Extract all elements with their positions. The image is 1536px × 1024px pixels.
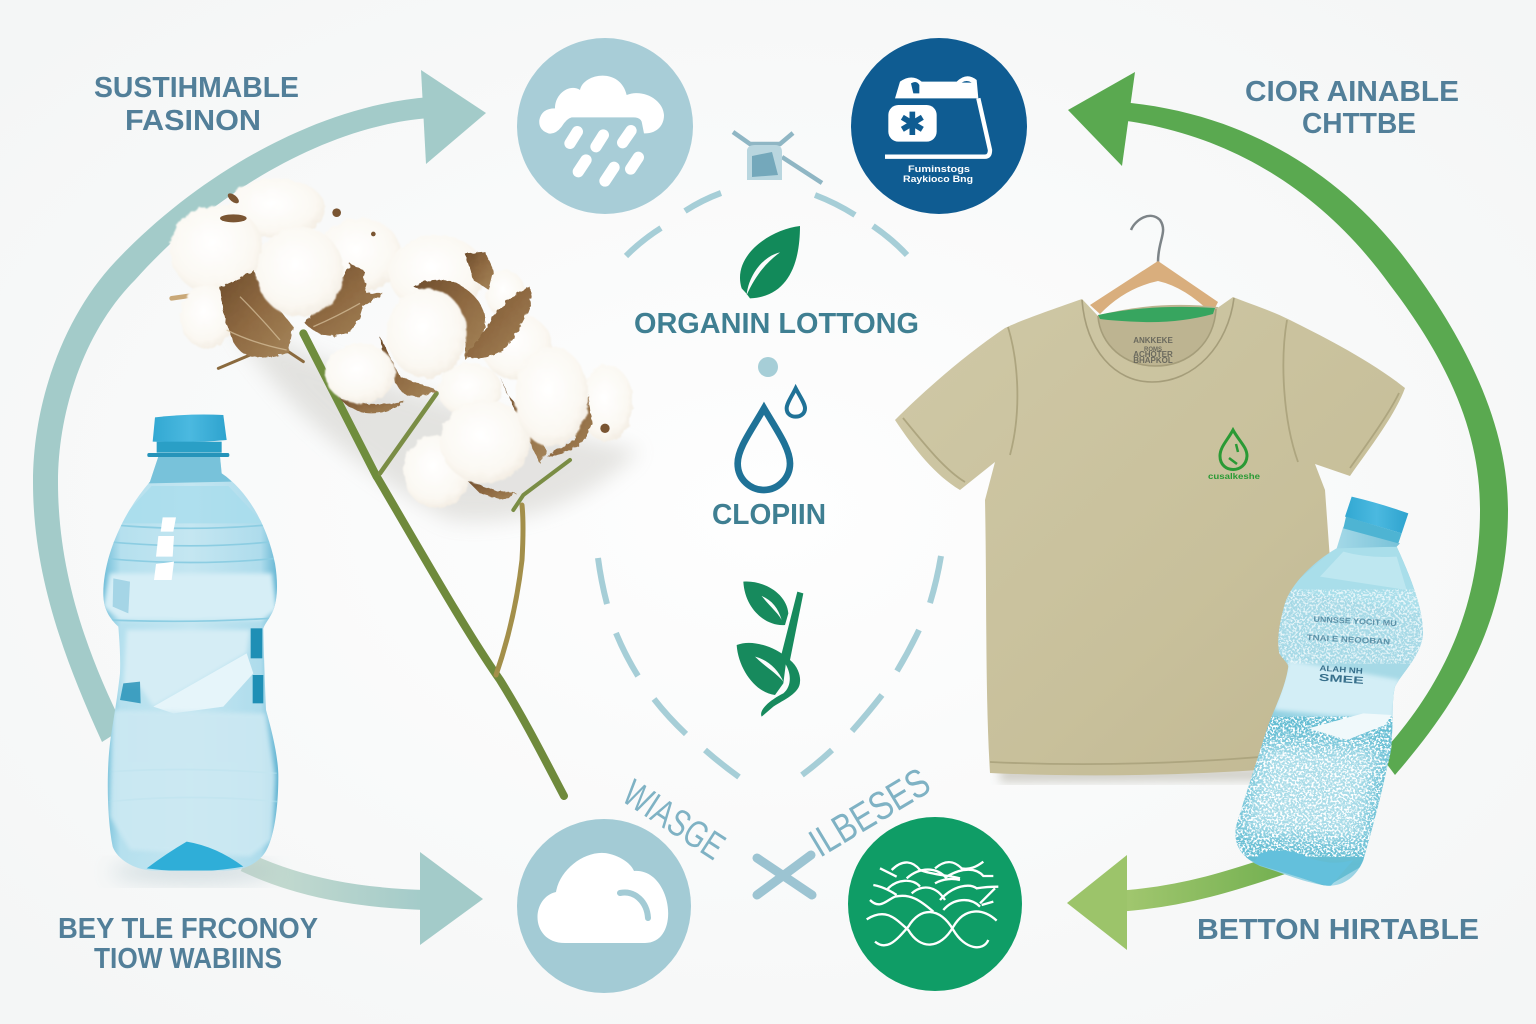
right bottle sparkle (1273, 590, 1427, 663)
right bottle shoulder (1287, 547, 1423, 613)
arrow: bottom left (245, 852, 483, 945)
neck label: BHAPKOL (1133, 356, 1173, 365)
right bottle clear window (1273, 660, 1400, 720)
dashed ring: bottom (598, 556, 941, 777)
left bottle cap (153, 415, 227, 442)
right bottle label text (1307, 615, 1397, 687)
left heading: FASINON (125, 105, 261, 137)
left heading: SUSTIHMABLE (94, 72, 299, 104)
neck label: ACHOTER (1133, 350, 1173, 359)
collar seams (1082, 298, 1234, 382)
sleeve and hem seams (903, 320, 1399, 764)
upper stems (172, 295, 570, 510)
left bottle ribs (105, 525, 278, 802)
right heading: CIOR AINABLE (1245, 76, 1459, 108)
neck label: ROMS (1144, 347, 1162, 353)
icon: cross (757, 855, 812, 895)
left bottle lower water (110, 710, 275, 857)
icon: leaf (740, 226, 800, 298)
right bottle label text: SMEE (1318, 673, 1365, 687)
icon: fabric waves circle (848, 817, 1022, 991)
icon: crossed fabric tag (733, 132, 822, 183)
bottom left heading (58, 913, 318, 975)
label: lbeses curved: ILBESES (802, 760, 938, 866)
left bottle label band (103, 573, 277, 620)
label: wasge curved: WIASGE (615, 772, 732, 869)
right bottle cap (1345, 497, 1408, 533)
plastic bottle: left (103, 415, 278, 882)
right heading (1245, 76, 1459, 140)
icon: blue recycled bag circle (851, 38, 1027, 214)
right bottle water (1230, 717, 1393, 887)
left bottle dark stripes (120, 628, 263, 703)
left bottle highlights (154, 517, 176, 580)
right bottle label text: UNNSSE YOCIT MU (1313, 615, 1397, 628)
bottom left heading: TIOW WABIINS (94, 943, 282, 975)
icon: sprout (737, 582, 803, 717)
bottom right heading: BETTON HIRTABLE (1197, 914, 1479, 946)
cotton husks (220, 252, 592, 500)
arrow: bottom right (1067, 855, 1300, 950)
bottom left heading: BEY TLE FRCONOY (58, 913, 318, 945)
right bottle label text: ALAH NH (1319, 664, 1363, 676)
icon: water drops (738, 388, 805, 490)
left bottle neck (148, 455, 232, 483)
t-shirt (895, 216, 1405, 782)
neck interior (1096, 305, 1218, 368)
cotton husk fibres (227, 297, 360, 350)
icon: rain cloud circle (517, 38, 693, 214)
shirt logo: cusalkeshe (1208, 472, 1261, 481)
dot (758, 357, 778, 377)
left bottle base (147, 842, 243, 871)
shirt logo (1208, 430, 1261, 481)
icon caption: Fuminstogs (908, 164, 970, 175)
shirt body (895, 297, 1405, 775)
right bottle base (1253, 851, 1353, 887)
right heading: CHTTBE (1302, 108, 1416, 140)
right bottle body (1235, 527, 1423, 886)
dashed ring: top (626, 193, 907, 256)
left bottle upper panel (123, 630, 250, 707)
lower stem (377, 477, 564, 796)
cotton fluff back layer (170, 178, 633, 508)
icon: cloud circle (517, 819, 691, 993)
cotton seed specks (220, 191, 610, 433)
right bottle diagonal ribbon (1308, 713, 1392, 740)
heading: organic cotton: ORGANIN LOTTONG (634, 308, 919, 340)
left bottle body (103, 457, 278, 871)
hanger (1090, 216, 1218, 314)
cotton fluff front layer (257, 227, 588, 483)
right bottle label band (1277, 590, 1425, 683)
neck label: ANKKEKE (1133, 336, 1173, 345)
right bottle label text: TNAI E NEOOBAN (1307, 633, 1391, 646)
arrow: top right cycle arc (1068, 72, 1508, 775)
cotton plant (170, 178, 640, 796)
plastic bottle: right (1230, 497, 1427, 887)
neck label (1133, 336, 1173, 365)
left heading (94, 72, 299, 137)
heading: clopin: CLOPIIN (712, 499, 826, 531)
arrow: top left cycle arc (33, 70, 486, 742)
left bottle diagonal panel (153, 653, 253, 713)
icon: blue recycled bag circle: Raykioco Bng (903, 174, 973, 185)
ribbing (1098, 307, 1215, 322)
